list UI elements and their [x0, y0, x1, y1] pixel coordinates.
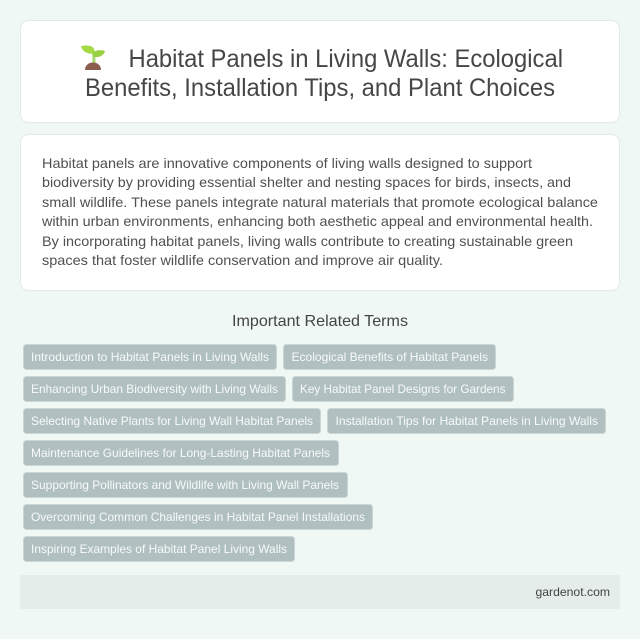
text block: description: Habitat panels are innovative components of living walls designed to support: [42, 155, 532, 171]
chip: Installation Tips for Habitat Panels in Living Walls: [336, 414, 598, 428]
chip: Inspiring Examples of Habitat Panel Living Walls: [31, 542, 287, 556]
chip: Enhancing Urban Biodiversity with Living Walls: [31, 382, 278, 396]
chip: Key Habitat Panel Designs for Gardens: [300, 382, 506, 396]
heading: important related terms: Important Related Terms: [232, 313, 408, 330]
text block: description: By incorporating habitat panels, living walls contribute to creating sustainable green: [42, 233, 573, 249]
title: Habitat Panels in Living Walls: Ecological: [128, 45, 563, 73]
chip: [24, 376, 286, 402]
chip: Introduction to Habitat Panels in Living Walls: [31, 350, 269, 364]
title: Benefits, Installation Tips, and Plant Choices: [85, 74, 555, 102]
chip: Selecting Native Plants for Living Wall Habitat Panels: [31, 414, 313, 428]
chip: [24, 344, 276, 370]
text block: description: [41, 155, 598, 268]
chip: Overcoming Common Challenges in Habitat Panel Installations: [31, 510, 365, 524]
chip: [24, 408, 320, 434]
chip: [284, 344, 496, 370]
panel: title card: [20, 20, 620, 122]
chip: Ecological Benefits of Habitat Panels: [292, 350, 488, 364]
chip: [24, 536, 294, 562]
text block: description: spaces that foster wildlife conservation and improve air quality.: [42, 252, 443, 268]
text block: description: within urban environments, enhancing both aesthetic appeal and environmental health.: [41, 213, 593, 229]
panel: related term chips: [24, 344, 606, 562]
title: [85, 45, 563, 102]
chip: [328, 408, 606, 434]
icon: seedling: [81, 46, 105, 70]
text block: description: biodiversity by providing essential shelter and nesting spaces for birds, insects, and: [42, 174, 571, 190]
chip: [292, 376, 514, 402]
chip: Maintenance Guidelines for Long-Lasting Habitat Panels: [31, 446, 330, 460]
chip: [24, 504, 372, 530]
footer source text: gardenot.com: [536, 585, 610, 599]
panel: description: [20, 134, 620, 290]
chip: [24, 472, 348, 498]
chip: [24, 440, 338, 466]
text block: description: small wildlife. These panels integrate natural materials that promote ecological balance: [42, 194, 598, 210]
footer: [20, 575, 620, 609]
chip: Supporting Pollinators and Wildlife with Living Wall Panels: [31, 478, 339, 492]
